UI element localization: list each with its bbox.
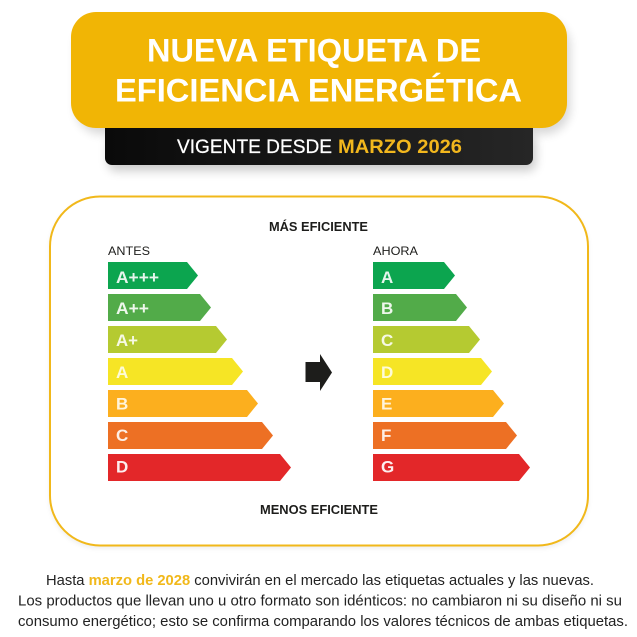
arrow [306, 354, 332, 391]
scale: ahora: C [381, 331, 393, 350]
title banner: EFICIENCIA ENERGÉTICA [115, 72, 522, 108]
footer text [18, 573, 628, 630]
scale: ahora: F [381, 426, 391, 445]
scale: ahora: G [381, 458, 394, 476]
footer text: consumo energético; esto se confirma comparando los valores técnicos de ambas etiquetas. [18, 614, 628, 630]
heading: antes: ANTES [108, 244, 150, 258]
scale: antes: A+ [116, 331, 138, 350]
footer text: Hasta marzo de 2028 convivirán en el mercado las etiquetas actuales y las nuevas. [46, 573, 594, 589]
scale: ahora [373, 262, 530, 481]
panel: label comparison [50, 196, 588, 546]
heading: menos eficiente: MENOS EFICIENTE [260, 503, 378, 517]
scale: antes: B [116, 394, 128, 414]
scale: ahora: E [381, 394, 392, 414]
subtitle banner: MARZO 2026 [338, 136, 462, 158]
scale: antes: A [116, 363, 128, 382]
title banner: NUEVA ETIQUETA DE [147, 32, 481, 68]
scale: antes [108, 262, 291, 481]
scale: antes: D [116, 458, 128, 476]
scale: ahora: D [381, 363, 393, 382]
footer text: Los productos que llevan uno u otro formato son idénticos: no cambiaron ni su diseño ni su [18, 594, 622, 610]
scale: ahora: A [381, 268, 393, 287]
heading: más eficiente: MÁS EFICIENTE [269, 219, 368, 234]
scale: antes: C [116, 426, 128, 445]
subtitle banner [105, 120, 533, 165]
scale: antes: A+++ [116, 268, 159, 287]
scale: antes: A++ [116, 299, 149, 318]
title banner [71, 12, 567, 128]
subtitle banner: VIGENTE DESDE [177, 136, 332, 158]
scale: ahora: B [381, 299, 393, 318]
heading: ahora: AHORA [373, 244, 418, 258]
